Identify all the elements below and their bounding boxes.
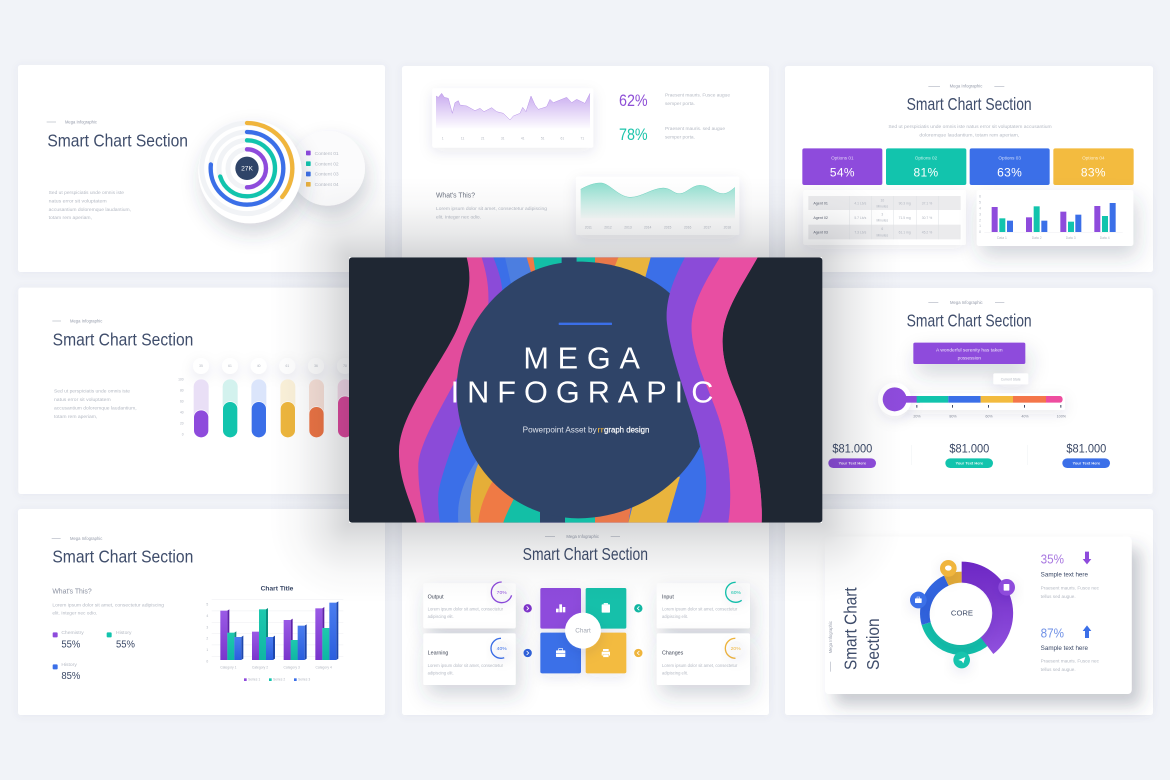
stat 78%: 78% [619,125,648,144]
panel: hero title slide [349,257,822,523]
text block [888,124,1052,139]
card: output: 70% [497,590,507,596]
text block: what's this: Lorem ipsum dolor sit amet, consectetur adipiscing [52,602,164,608]
eyebrow: Mega Infographic [52,318,103,323]
bar chart: 1 [979,224,981,228]
subtitle [523,425,649,434]
subtitle: graph design [604,425,649,434]
text block: what's this: Lorem ipsum dolor sit amet, consectetur adipiscing [436,206,547,212]
card: output: Lorem ipsum dolor sit amet, consectetur [428,606,503,612]
stat: 87%: Praesent mauris. Fusce nec [1041,659,1099,665]
bar chart: Data 1 [997,236,1007,240]
heading: Smart Chart Section [53,330,193,350]
donut chart [910,560,1015,668]
3D bar chart: 1 [206,648,208,652]
card: output [423,582,516,628]
data table: 5.7 Lb/s [854,216,867,220]
callout: A wonderful serenity has taken [936,348,1003,354]
text block: accusantium doloremque laudantium, [54,405,137,411]
eyebrow: Mega Infographic: Mega Infographic [70,318,103,323]
card: learning: adipiscing elit. [428,670,454,676]
center circle: chart [565,613,601,649]
value column 2: $81.000 [949,442,990,456]
bar chart: Data 4 [1100,236,1110,240]
legend bubble: Content 04 [315,182,339,188]
callout [913,343,1025,364]
axis labels: 60 [180,399,184,403]
purple area chart: 71 [580,136,584,140]
value column 2 [945,442,993,468]
rotated eyebrow [828,620,833,672]
stat: history [107,630,135,650]
stat: 35%: tellus sed augue. [1041,594,1076,600]
text block: what's this [436,190,547,220]
eyebrow: Mega Infographic [928,300,1004,305]
callout: possession [958,355,981,361]
option tile 04: 83% [1081,165,1106,179]
teal area chart: 2013 [624,226,632,230]
eyebrow: Mega Infographic [47,119,98,124]
stat: history 2 [53,662,80,682]
pill chart: 70 [343,364,347,368]
value column 3: Your Text Here [1072,461,1101,466]
stat: chemistry [53,630,84,650]
pill chart: 36 [314,364,318,368]
data table: 10 [880,198,884,202]
stat: history 2: History [61,662,77,668]
card: changes: adipiscing elit. [662,670,688,676]
arrow: right purple [523,604,532,612]
purple area chart: 1 [442,136,444,140]
text block: accusantium doloremque laudantium, [49,207,131,213]
data table: Minutes [877,204,888,208]
eyebrow: Mega Infographic [52,536,103,541]
3D bar chart: Category 2 [252,665,268,669]
text block: totam rem aperiam, [54,414,97,420]
card: input: Lorem ipsum dolor sit amet, consectetur [662,606,738,612]
teal area chart: 2012 [604,226,612,230]
option tile 03: 63% [997,165,1022,179]
tooltip: current state [993,373,1028,384]
progress bar: 40% [1021,414,1029,418]
stat: 35%: Sample text here [1041,572,1089,578]
heading: Smart Chart Section [907,94,1032,114]
icon: book [998,579,1015,596]
axis labels: 100 [178,378,184,382]
center circle: chart: Chart [575,628,591,635]
accent line [559,323,612,325]
arrow: right blue [523,649,532,657]
stat 78%: Praesent mauris. sed augue [665,126,725,132]
quadrant tile: blue with briefcase icon [540,633,581,673]
3D bar chart: 5 [206,603,208,607]
bar chart [977,190,1133,246]
pill chart: 61 [285,364,289,368]
panel: radial bar chart slide [18,65,385,272]
purple area chart: 11 [461,136,465,140]
3D bar chart: Category 1 [220,665,237,669]
text block [49,190,131,221]
panel: pill chart slide [18,288,385,494]
data table: 6 [881,227,883,231]
data table: Agent 01 [813,201,828,205]
pill chart: 35 [199,364,203,368]
value column 3 [1062,442,1110,468]
data table [803,190,966,245]
option tile 02 [886,148,966,185]
panel: 3D bar chart slide [18,509,385,715]
teal area chart: 2016 [684,226,692,230]
axis labels: 0 [182,432,184,436]
stat: history: 55% [116,639,135,650]
stat 62% [619,91,730,110]
axis labels: 40 [180,410,184,414]
legend bubble: Content 01 [315,151,339,157]
3D bar chart: 0 [206,659,208,663]
title: MEGA [523,342,641,376]
donut chart: CORE [951,608,973,617]
bar chart: 5 [979,201,981,205]
teal area chart: 2011 [585,226,592,230]
arrow: left yellow [634,649,642,657]
value column 1: $81.000 [832,442,873,456]
card: input [657,582,750,628]
bar chart: 2 [979,218,981,222]
quadrant tile: yellow with printer icon [586,633,626,673]
option tile 01: 54% [830,165,855,179]
subtitle: rr [597,425,604,434]
progress bar: 60% [985,414,993,418]
eyebrow: Mega Infographic: Mega Infographic [950,84,983,89]
text block: what's this [52,587,164,617]
radial bar chart: 27K [241,166,253,173]
data table: Agent 02 [813,216,828,220]
text block: Sed ut perspiciatis unde omnis iste [54,389,130,395]
data table: 37.1 % [922,201,932,205]
purple area chart: 21 [481,136,485,140]
data table: Minutes [877,233,888,237]
panel: progress bar slide [785,288,1153,494]
data table: 45.2 % [922,231,932,235]
eyebrow: Mega Infographic: Mega Infographic [950,300,983,305]
stat: 87% [1041,625,1099,673]
rotated heading: Smart Chart [841,587,861,670]
option tile 02: 81% [913,165,938,179]
card: changes [657,633,750,685]
heading: Smart Chart Section [907,310,1032,330]
stat: history: History [116,630,132,636]
3D bar chart [206,586,343,682]
bar chart: Data 2 [1032,236,1042,240]
card: changes: Changes [662,650,684,656]
text block [54,389,137,420]
legend bubble: Content 03 [315,172,339,178]
text block: what's this: What's This? [52,587,92,596]
rotated eyebrow: Mega Infographic [828,620,833,653]
icon: paper plane [953,652,970,668]
value column 2: Your Text Here [955,461,984,466]
card: input: adipiscing elit. [662,614,688,620]
option tile 03: Options 03 [998,156,1021,161]
text block: what's this: elit. Integer nec odio. [436,214,481,220]
data table: 7.3 Lb/s [854,231,867,235]
progress bar: 100% [1057,414,1067,418]
pill chart: 61 [228,364,232,368]
option tile 04: Options 04 [1082,156,1105,161]
3D bar chart: Category 3 [284,665,300,669]
purple area chart: 61 [560,136,564,140]
chart title: Chart Title [261,586,294,593]
option tile 04 [1053,148,1134,185]
3D bar chart: 3 [206,625,208,629]
purple area chart: 31 [501,136,505,140]
option tile 01: Options 01 [831,156,854,161]
data table: 3 [881,212,883,216]
teal area chart: 2015 [664,226,672,230]
data table: 4.1 Lb/s [854,201,867,205]
bar chart: 6 [979,195,981,199]
text block: natus error sit voluptatem [54,397,111,403]
eyebrow: Mega Infographic: Mega Infographic [566,534,600,539]
3D bar chart: Series 1 [248,678,260,682]
3D bar chart: Category 4 [316,665,332,669]
legend bubble: Content 02 [315,161,339,167]
teal area chart: 2018 [724,226,731,230]
quadrant tile: purple with bar chart icon [540,588,581,629]
card: learning [423,633,516,685]
data table: 71.5 mg [899,216,911,220]
heading: Smart Chart Section [47,131,188,151]
progress bar [878,383,1067,418]
purple area chart [432,88,593,148]
value column 3: $81.000 [1066,442,1107,456]
option tile 03 [970,148,1050,185]
card: changes: Lorem ipsum dolor sit amet, consectetur [662,663,738,669]
axis labels: 20 [180,421,184,425]
bar chart: 3 [979,212,981,216]
panel: area charts slide [402,66,769,272]
panel: options table slide [785,66,1153,272]
card: changes: 20% [731,646,741,652]
pill chart: 40 [257,364,261,368]
rotated heading [841,587,883,670]
teal area chart [576,177,739,235]
stat: chemistry: Chemistry [61,630,84,636]
option tile 01 [802,148,882,185]
3D bar chart: Series 3 [298,678,310,682]
center blob [457,262,700,518]
stat: 35% [1041,552,1099,600]
stat 78% [619,125,725,144]
card: input: 60% [731,590,742,596]
axis labels: 80 [180,388,184,392]
teal area chart: 2014 [644,226,652,230]
card: learning: 40% [497,646,507,652]
stat: 87%: Sample text here [1041,646,1089,652]
stat: 87%: tellus sed augue. [1041,667,1076,673]
value column 1 [828,442,876,468]
heading: Smart Chart Section [523,544,648,564]
icon: briefcase [910,592,927,608]
text block: Sed ut perspiciatis unde omnis iste natus error sit voluptatem accusantium [888,124,1052,130]
data table: Agent 03 [813,231,828,235]
bar chart: Data 3 [1066,236,1076,240]
stat 62%: 62% [619,91,648,110]
3D bar chart: 2 [206,637,208,641]
panel: core donut slide [785,509,1153,715]
data table: 90.3 mg [899,201,911,205]
data table: 61.1 mg [899,231,911,235]
data table: Minutes [877,219,888,223]
stat: 87%: 87% [1041,626,1064,640]
purple area chart: 51 [541,136,545,140]
bar chart: 4 [979,207,981,211]
legend bubble [290,131,365,206]
value column 1: Your Text Here [838,461,867,466]
eyebrow: Mega Infographic: Mega Infographic [65,119,98,124]
arrow: left teal [634,604,642,612]
option tile 02: Options 02 [915,156,938,161]
card: output: adipiscing elit. [428,614,454,620]
eyebrow: Mega Infographic [928,84,1004,89]
eyebrow: Mega Infographic: Mega Infographic [70,536,103,541]
text block: what's this: What's This? [436,190,475,199]
stat: 35%: 35% [1041,552,1064,566]
stat: history 2: 85% [61,671,80,682]
card: input: Input [662,595,674,601]
title: INFOGRAPIC [451,376,713,410]
card: output: Output [428,595,444,601]
panel: four quadrant slide [402,509,769,715]
stat: chemistry: 55% [61,639,80,650]
rotated heading: Section [863,618,883,670]
card: learning: Learning [428,650,448,656]
purple area chart: 41 [521,136,525,140]
heading: Smart Chart Section [52,546,193,566]
stat 78%: semper porta. [665,134,695,140]
radial bar chart [198,120,302,223]
3D bar chart: 4 [206,614,208,618]
stat 62%: semper porta. [665,101,695,107]
progress bar: 20% [913,414,921,418]
subtitle: Powerpoint Asset by [523,425,597,434]
title [451,342,713,410]
stat 62%: Praesent mauris. Fusce augue [665,93,730,99]
tooltip: current state: Current State [1001,377,1021,381]
text block: doloremque laudantium, totam rem aperiam, [919,133,1019,139]
quadrant tile: teal with clipboard icon [586,588,626,629]
text block: what's this: elit. Integer nec odio. [52,611,97,617]
ribbons [399,257,762,523]
progress bar: 80% [949,414,957,418]
3D bar chart: Series 2 [273,678,285,682]
text block: totam rem aperiam, [49,215,92,221]
axis labels [178,378,184,436]
stat: 35%: Praesent mauris. Fusce nec [1041,586,1099,592]
text block: natus error sit voluptatem [49,198,107,204]
card: learning: Lorem ipsum dolor sit amet, consectetur [428,663,503,669]
text block: Sed ut perspiciatis unde omnis iste [49,190,124,196]
teal area chart: 2017 [704,226,711,230]
data table: 30.7 % [922,216,932,220]
bar chart: 0 [979,230,981,234]
eyebrow: Mega Infographic [545,534,620,539]
icon: speech bubble [940,560,957,577]
pill chart [193,358,353,438]
